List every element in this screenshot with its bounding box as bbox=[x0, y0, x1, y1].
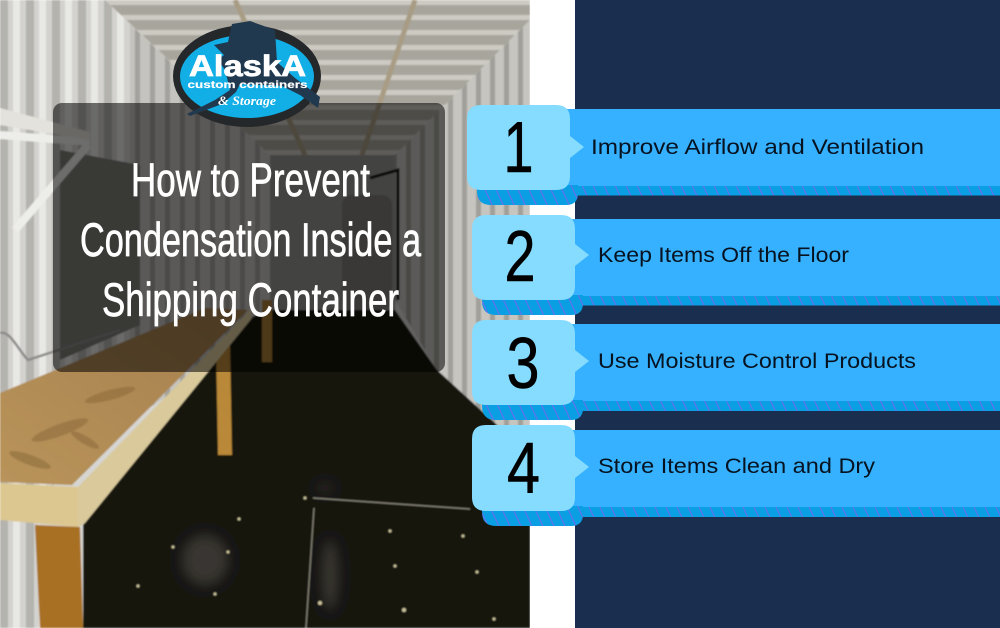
white divider strip bbox=[530, 0, 575, 628]
ceiling bbox=[105, 0, 530, 155]
title: Condensation Inside a bbox=[80, 213, 422, 266]
step 2: Keep Items Off the Floor bbox=[598, 244, 849, 267]
conduit bbox=[0, 330, 120, 360]
front bench leg bbox=[35, 525, 83, 628]
back wall bbox=[270, 155, 395, 320]
left wall bbox=[0, 0, 124, 486]
floor nails bbox=[136, 496, 496, 620]
title bbox=[80, 153, 422, 326]
pipe bbox=[370, 170, 398, 300]
step 3 bbox=[472, 320, 1000, 420]
Alaska silhouette bbox=[187, 21, 320, 116]
step 1: 1 bbox=[504, 108, 534, 188]
lower left wall bbox=[0, 520, 40, 628]
step 4: 4 bbox=[507, 429, 540, 509]
bench leg bbox=[216, 345, 232, 455]
step 4: Store Items Clean and Dry bbox=[598, 455, 876, 478]
photo: container interior bbox=[0, 0, 530, 628]
floor seams bbox=[306, 498, 470, 628]
ceiling ribs bbox=[235, 0, 415, 155]
logo text: & Storage bbox=[218, 93, 276, 108]
step 3: Use Moisture Control Products bbox=[598, 350, 916, 373]
bench front face bbox=[0, 483, 78, 527]
step 2 bbox=[472, 215, 1000, 315]
title: Shipping Container bbox=[102, 273, 399, 326]
brace bbox=[0, 135, 90, 230]
step 1: Improve Airflow and Ventilation bbox=[591, 136, 924, 159]
step 2: 2 bbox=[504, 217, 536, 297]
shelf bbox=[0, 108, 90, 140]
navy panel bbox=[575, 0, 1000, 628]
translucent title panel bbox=[53, 103, 445, 372]
logo text: AlaskA bbox=[189, 50, 306, 83]
title: How to Prevent bbox=[131, 153, 370, 206]
bench top bbox=[0, 308, 248, 485]
step 4 bbox=[472, 425, 1000, 526]
logo text: custom containers bbox=[188, 79, 308, 91]
window bbox=[60, 150, 140, 360]
OSB flakes bbox=[8, 383, 136, 472]
logo text bbox=[188, 50, 308, 108]
far bench leg bbox=[262, 300, 272, 362]
step 1 bbox=[467, 105, 1000, 205]
water tank bbox=[342, 195, 392, 310]
right wall bbox=[395, 20, 530, 455]
floor smudges bbox=[181, 484, 339, 611]
floor bbox=[83, 310, 530, 628]
logo: Alaska Custom Containers bbox=[173, 21, 321, 127]
bench side bbox=[78, 310, 252, 527]
step 3: 3 bbox=[506, 324, 540, 404]
left wall far part bbox=[130, 24, 270, 420]
